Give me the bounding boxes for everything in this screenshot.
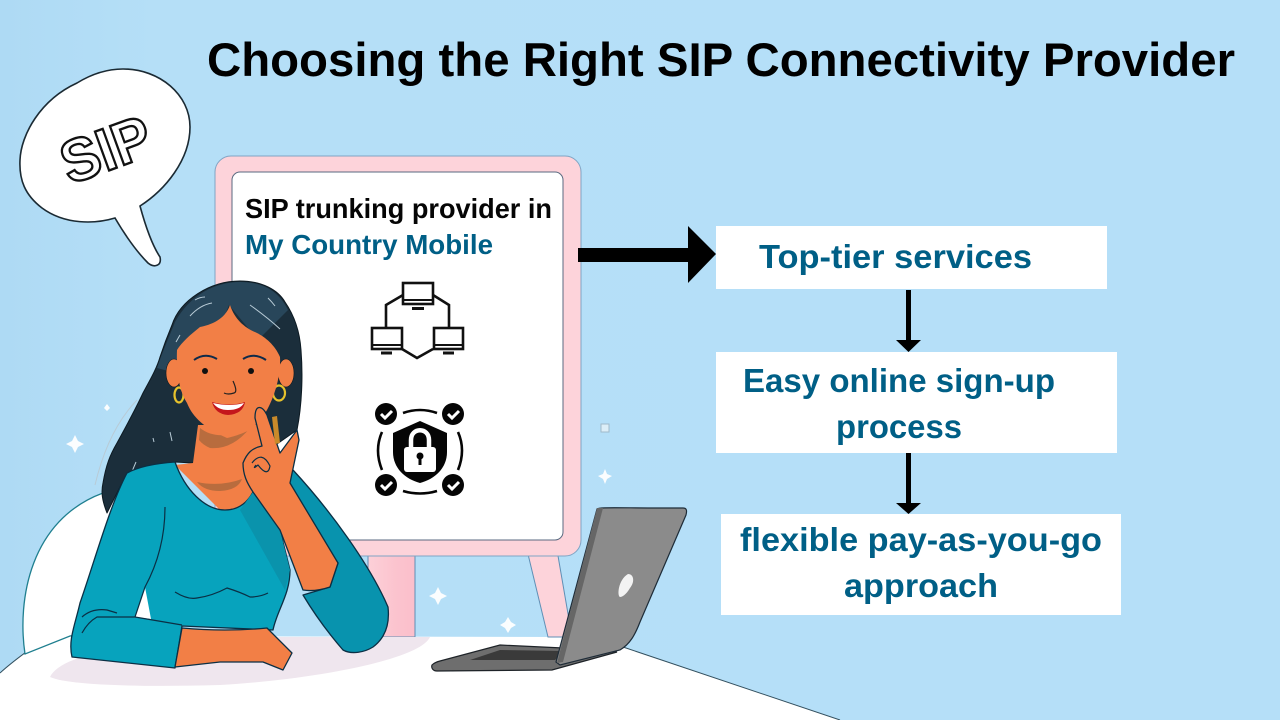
- box: easy online sign-up process: Easy online sign-up: [743, 362, 1055, 399]
- icon: network of computers: [372, 283, 463, 358]
- hair upper highlight: [157, 282, 288, 372]
- box: top-tier services: Top-tier services: [759, 238, 1032, 275]
- speech bubble: SIP: [20, 69, 190, 266]
- box: flexible pay-as-you-go approach: [721, 514, 1121, 615]
- pencil: [272, 416, 280, 444]
- icon: security shield with padlock: [375, 403, 464, 496]
- arrow: board to top-tier services: [578, 226, 716, 283]
- board legs: [368, 550, 572, 637]
- box: easy online sign-up process: [716, 352, 1117, 453]
- gap between arm and body: [135, 587, 151, 619]
- shirt: [71, 462, 290, 668]
- neck shadows: [197, 428, 250, 491]
- title: Choosing the Right SIP Connectivity Provider: [207, 33, 1235, 86]
- facial features: [194, 356, 266, 415]
- board heading: SIP trunking provider in: [245, 193, 552, 224]
- fingers: [252, 457, 270, 472]
- board heading: [245, 193, 552, 260]
- panel: presentation board: [215, 156, 581, 556]
- box: flexible pay-as-you-go approach: flexible pay-as-you-go: [740, 521, 1102, 558]
- raised forearm and hand: [243, 407, 338, 591]
- box: easy online sign-up process: process: [836, 408, 962, 445]
- shirt details: [82, 507, 268, 633]
- box: top-tier services: [716, 226, 1107, 289]
- right sleeve: [280, 470, 388, 653]
- ears and earrings: [166, 359, 294, 402]
- sparkles: [66, 404, 612, 633]
- board heading: My Country Mobile: [245, 229, 493, 260]
- table: [0, 636, 840, 720]
- chair: [23, 493, 150, 654]
- neck: [175, 425, 262, 515]
- hair: [102, 281, 302, 513]
- shirt side shading: [240, 492, 290, 590]
- arrow: sign-up to pay-as-you-go: [896, 453, 921, 514]
- box: flexible pay-as-you-go approach: approach: [844, 567, 998, 604]
- laptop: [432, 508, 687, 671]
- speech bubble: SIP: SIP: [51, 103, 161, 197]
- table edge lines: [0, 635, 840, 720]
- hair strands: [95, 297, 280, 488]
- lower hand: [175, 628, 292, 670]
- table shadow: [50, 637, 430, 686]
- woman character: [71, 281, 388, 670]
- face: [177, 305, 280, 438]
- arrow: top-tier to sign-up: [896, 290, 921, 352]
